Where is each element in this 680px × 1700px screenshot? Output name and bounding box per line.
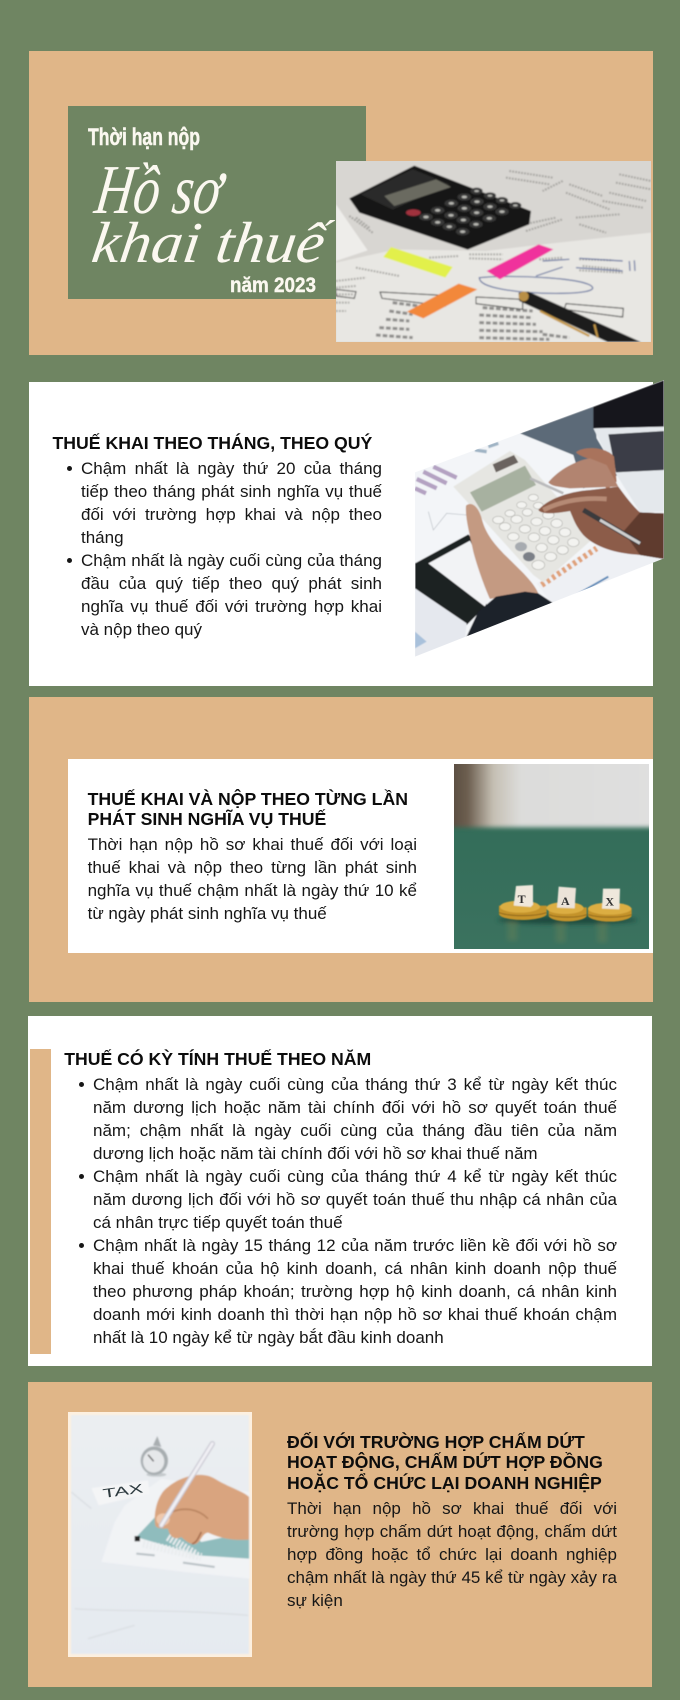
- right hand: back finger: [576, 448, 617, 490]
- bullet list: [67, 459, 382, 639]
- body text: Thời hạn nộp hồ sơ khai thuế đối với loại: [88, 835, 417, 854]
- bullet list: Chậm nhất là ngày 15 tháng 12 của năm trước liền kề đối với hồ sơ: [93, 1236, 617, 1255]
- title script line two: khai thuế: [88, 210, 337, 275]
- bullet list: nhất là 10 ngày kể từ ngày bắt đầu kinh doanh: [93, 1328, 444, 1347]
- bullet list: [79, 1075, 617, 1347]
- panel: per-occurrence tax: [29, 697, 653, 1002]
- heading: ĐỐI VỚI TRƯỜNG HỢP CHẤM DỨT: [287, 1432, 585, 1452]
- body text: chậm nhất là ngày thứ 45 kể từ ngày xảy ra: [287, 1568, 617, 1587]
- title box: [68, 106, 366, 299]
- body text: nghĩa vụ thuế chậm nhất là ngày thứ 10 kể: [88, 881, 417, 900]
- photo: hand filling in tax form: TAX: [102, 1481, 145, 1501]
- title kicker: Thời hạn nộp: [88, 124, 200, 151]
- photo: TAX blocks on gold coins: T: [518, 892, 526, 906]
- right hand: middle finger: [548, 458, 618, 488]
- panel: title banner: [29, 51, 653, 355]
- bullet list: dương lịch hoặc năm tài chính đối với hồ sơ khai thuế năm: [93, 1144, 538, 1163]
- bullet list: năm dương lịch đối với hồ sơ quyết toán thuế thu nhập cá nhân của: [93, 1190, 617, 1209]
- title script line one: Hồ sơ: [90, 151, 230, 229]
- bullet list: và nộp theo quý: [81, 620, 202, 639]
- bullet list: năm; chậm nhất là ngày cuối cùng của tháng đầu tiên của năm: [93, 1121, 617, 1140]
- heading: HOẶC TỔ CHỨC LẠI DOANH NGHIỆP: [287, 1473, 602, 1493]
- photo: TAX blocks on gold coins: X: [605, 895, 614, 909]
- panel: business termination: [28, 1382, 652, 1687]
- bullet list: Chậm nhất là ngày cuối cùng của tháng thứ 4 kể từ ngày kết thúc: [93, 1167, 617, 1186]
- body text: hợp đồng hoặc tổ chức lại doanh nghiệp: [287, 1545, 617, 1564]
- bullet list: nghĩa vụ thuế đối với trường hợp khai: [81, 597, 382, 616]
- bullet list: Chậm nhất là ngày cuối cùng của tháng thứ 3 kể từ ngày kết thúc: [93, 1075, 617, 1094]
- photo: hand filling in tax form: [68, 1412, 252, 1657]
- bullet list: doanh mới kinh doanh thì thời hạn nộp hồ sơ khai thuế khoán chậm: [93, 1305, 617, 1324]
- panel: annual tax: [28, 1016, 652, 1366]
- heading: PHÁT SINH NGHĨA VỤ THUẾ: [88, 809, 326, 829]
- bullet list: Chậm nhất là ngày cuối cùng của tháng: [81, 551, 382, 570]
- body text: trường hợp chấm dứt hoạt động, chấm dứt: [287, 1522, 617, 1541]
- accent bar: [30, 1049, 51, 1354]
- panel: monthly and quarterly tax: [29, 382, 653, 686]
- bullet list: Chậm nhất là ngày thứ 20 của tháng: [81, 459, 382, 478]
- photo: TAX blocks on gold coins: A: [561, 894, 570, 908]
- bullet list: theo phương pháp khoán; trường hợp hộ kinh doanh, cá nhân kinh: [93, 1282, 617, 1301]
- heading: [88, 789, 408, 829]
- bullet list: tháng: [81, 528, 124, 547]
- heading: [287, 1432, 603, 1493]
- body text: [287, 1499, 617, 1610]
- bullet list: cá nhân trực tiếp quyết toán thuế: [93, 1213, 343, 1232]
- heading: THUẾ KHAI THEO THÁNG, THEO QUÝ: [52, 433, 372, 453]
- title year: năm 2023: [230, 273, 316, 297]
- heading: THUẾ KHAI VÀ NỘP THEO TỪNG LẦN: [88, 789, 408, 809]
- bullet list: đầu của quý tiếp theo quý phát sinh: [81, 574, 382, 593]
- heading: HOẠT ĐỘNG, CHẤM DỨT HỢP ĐỒNG: [287, 1452, 603, 1472]
- white card: [68, 759, 653, 953]
- body text: sự kiện: [287, 1591, 343, 1610]
- bullet list: tiếp theo tháng phát sinh nghĩa vụ thuế: [81, 482, 382, 501]
- body text: [88, 835, 417, 923]
- right hand: palm and wrist: [538, 487, 664, 559]
- heading: THUẾ CÓ KỲ TÍNH THUẾ THEO NĂM: [64, 1049, 371, 1069]
- body text: từ ngày phát sinh nghĩa vụ thuế: [88, 904, 327, 923]
- bullet list: đối với trường hợp khai và nộp theo: [81, 505, 382, 524]
- photo: calculator on tax papers: [336, 161, 651, 342]
- body text: Thời hạn nộp hồ sơ khai thuế đối với: [287, 1499, 617, 1518]
- body text: thuế khai và nộp theo từng lần phát sinh: [88, 858, 417, 877]
- photo: TAX blocks on gold coins: [454, 764, 649, 949]
- bullet list: khai thuế khoán của hộ kinh doanh, cá nhân kinh doanh nộp thuế: [93, 1259, 617, 1278]
- photo: hands using calculator: [415, 380, 664, 656]
- bullet list: năm dương lịch hoặc năm tài chính đối với hồ sơ quyết toán thuế: [93, 1098, 617, 1117]
